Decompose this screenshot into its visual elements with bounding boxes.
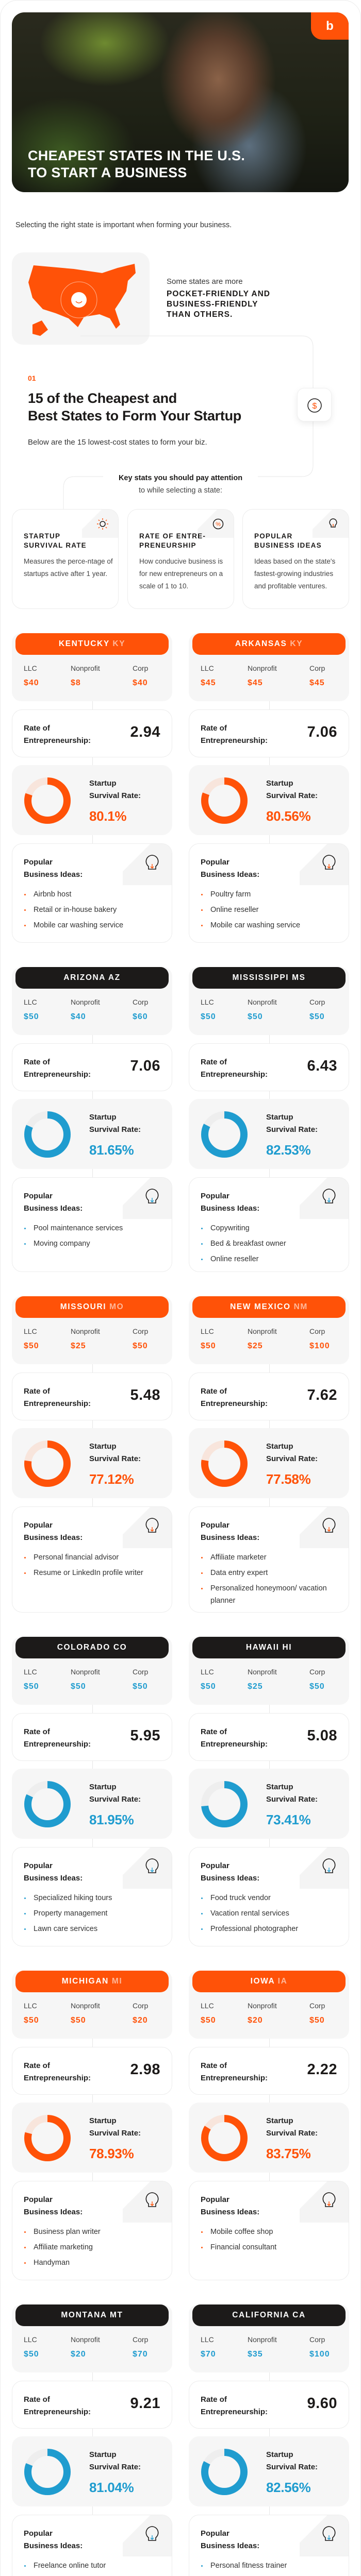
text: Startup [266,1113,293,1122]
text: $50 [24,1682,39,1691]
text: Popular [24,2529,53,2538]
text: Entrepreneurship: [201,736,268,745]
text: Corp [309,2335,325,2344]
text: Nonprofit [71,1327,100,1335]
text: Freelance online tutor [34,2562,106,2570]
text: $70 [133,2350,148,2359]
text: $40 [133,679,148,687]
text: $50 [201,1012,216,1021]
state: Missouri [12,1296,172,1613]
text: Specialized hiking tours [34,1894,112,1902]
text: $40 [71,1012,86,1021]
text: Entrepreneurship: [201,1070,268,1079]
text: Rate of [201,724,227,733]
text: Corp [309,2002,325,2010]
text: Popular [24,1192,53,1200]
text: Survival Rate: [266,791,318,800]
text: 5.08 [307,1727,337,1744]
text: 81.04% [89,2480,134,2495]
key card: entrepreneurship: How conducive business is for new entrepreneurs on a scale of 1 to 10. [139,557,223,590]
key card: ideas: POPULAR [254,532,292,540]
text: $50 [71,1682,86,1691]
section heading: Best States to Form Your Startup [28,408,241,423]
text: 82.53% [266,1142,310,1158]
text: LLC [24,998,37,1006]
text: Popular [201,1521,229,1530]
text: Rate of [24,1058,50,1066]
text: Entrepreneurship: [201,1740,268,1749]
state: California [189,2304,349,2576]
key card: entrepreneurship [127,509,234,609]
text: Online reseller [210,1255,259,1263]
state: Arizona [12,967,172,1272]
text: ARKANSAS KY [235,639,303,648]
text: $20 [71,2350,86,2359]
map callout text [167,277,270,319]
text: LLC [201,998,214,1006]
state: Montana [12,2304,172,2576]
icon: dollar: $ [313,402,317,411]
map callout text: Some states are more [167,277,243,286]
text: Rate of [201,1727,227,1736]
text: Popular [24,1521,53,1530]
text: Mobile car washing service [34,921,123,929]
text: $70 [201,2350,216,2359]
text: $25 [248,1342,263,1350]
text: Startup [89,779,117,788]
text: Business Ideas: [201,1533,259,1542]
state: Hawaii [189,1637,349,1946]
text: LLC [24,1668,37,1676]
text: Entrepreneurship: [24,2074,91,2082]
key card: entrepreneurship: RATE OF ENTRE- [139,532,206,540]
text: Corp [309,664,325,672]
text: COLORADO CO [57,1643,127,1652]
text: Moving company [34,1240,90,1248]
key card: survival: STARTUP [24,532,60,540]
text: Business Ideas: [24,870,83,879]
text: LLC [201,1668,214,1676]
text: $45 [309,679,325,687]
text: $35 [248,2350,263,2359]
text: Nonprofit [248,1327,277,1335]
key stats intro: Key stats you should pay attention [119,474,242,482]
text: Startup [266,2116,293,2125]
text: 9.21 [130,2395,160,2412]
text: NEW MEXICO NM [230,1302,308,1311]
text: Corp [309,1327,325,1335]
icon: dollar [297,388,332,421]
text: LLC [24,2335,37,2344]
text: MISSISSIPPI MS [232,973,306,982]
key card: entrepreneurship: PRENEURSHIP [139,541,196,549]
text: $50 [24,1342,39,1350]
text: $45 [201,679,216,687]
text: 81.65% [89,1142,134,1158]
text: $60 [133,1012,148,1021]
text: 78.93% [89,2146,134,2161]
text: Copywriting [210,1224,250,1232]
text: Vacation rental services [210,1909,289,1918]
section heading [28,374,241,447]
map callout text: BUSINESS-FRIENDLY [167,300,258,309]
text: Popular [201,2195,229,2204]
text: Rate of [201,1387,227,1396]
text: Personalized honeymoon/ vacation planner [210,1584,327,1605]
state: Colorado [12,1637,172,1946]
text: Retail or in-house bakery [34,906,117,914]
text: LLC [201,664,214,672]
text: Business Ideas: [24,1533,83,1542]
text: Nonprofit [71,2002,100,2010]
text: Corp [309,998,325,1006]
text: Entrepreneurship: [201,2074,268,2082]
text: Property management [34,1909,107,1918]
text: 73.41% [266,1812,310,1827]
text: Popular [24,858,53,867]
key card: entrepreneurship: % [216,521,221,528]
text: 80.1% [89,808,126,824]
text: Professional photographer [210,1925,298,1933]
text: Bed & breakfast owner [210,1240,286,1248]
text: Survival Rate: [89,1795,141,1804]
text: Mobile coffee shop [210,2228,273,2236]
text: $50 [71,2016,86,2025]
text: Corp [133,2335,148,2344]
text: $50 [309,2016,325,2025]
text: Entrepreneurship: [24,1740,91,1749]
hero title: TO START A BUSINESS [28,165,187,180]
text: LLC [24,2002,37,2010]
text: Nonprofit [248,2002,277,2010]
text: Business Ideas: [201,2208,259,2216]
text: Poultry farm [210,890,251,899]
text: Affiliate marketing [34,2243,93,2251]
text: $20 [248,2016,263,2025]
text: Business Ideas: [24,1204,83,1213]
text: Startup [266,779,293,788]
text: LLC [24,664,37,672]
section heading: 01 [28,374,36,382]
text: Nonprofit [248,1668,277,1676]
text: $20 [133,2016,148,2025]
text: LLC [201,2002,214,2010]
text: Rate of [201,2061,227,2070]
text: Business Ideas: [24,1874,83,1883]
brand badge: b [326,19,334,33]
text: Nonprofit [71,998,100,1006]
text: Popular [201,1192,229,1200]
text: 77.58% [266,1471,310,1487]
key card: ideas [242,509,349,609]
text: Rate of [24,2061,50,2070]
text: Handyman [34,2259,70,2267]
map callout text: POCKET-FRIENDLY AND [167,290,270,298]
text: MONTANA MT [61,2311,123,2319]
key card: survival: Measures the perce-ntage of startups active after 1 year. [24,557,113,578]
text: Survival Rate: [266,1125,318,1134]
text: Popular [201,1861,229,1870]
text: $50 [133,1682,148,1691]
text: Nonprofit [248,664,277,672]
text: Popular [201,2529,229,2538]
text: Survival Rate: [266,1795,318,1804]
text: IOWA IA [251,1977,287,1986]
text: Nonprofit [71,1668,100,1676]
text: Rate of [201,2395,227,2404]
text: Entrepreneurship: [201,1399,268,1408]
text: Nonprofit [71,2335,100,2344]
text: 7.06 [130,1058,160,1074]
text: Business Ideas: [201,870,259,879]
text: Startup [89,1783,117,1791]
text: LLC [201,1327,214,1335]
state: Mississippi [189,967,349,1272]
text: $50 [248,1012,263,1021]
text: Business Ideas: [201,1204,259,1213]
state: Kentucky [12,633,172,943]
section heading: Below are the 15 lowest-cost states to form your biz. [28,438,207,447]
text: 9.60 [307,2395,337,2412]
text: Survival Rate: [89,1125,141,1134]
state: New Mexico [189,1296,349,1613]
text: $50 [24,2016,39,2025]
text: Popular [24,2195,53,2204]
text: Nonprofit [71,664,100,672]
text: $50 [24,2350,39,2359]
text: Survival Rate: [89,791,141,800]
text: Corp [133,1327,148,1335]
text: Entrepreneurship: [24,2408,91,2416]
text: 7.06 [307,724,337,740]
text: Startup [266,2450,293,2459]
text: Airbnb host [34,890,71,899]
hero image [12,12,349,192]
text: $50 [309,1682,325,1691]
text: LLC [24,1327,37,1335]
text: 5.48 [130,1387,160,1403]
text: Personal fitness trainer [210,2562,287,2570]
text: Business Ideas: [201,2541,259,2550]
text: Entrepreneurship: [24,1070,91,1079]
text: CALIFORNIA CA [232,2311,306,2319]
text: Rate of [24,2395,50,2404]
text: Financial consultant [210,2243,276,2251]
text: MICHIGAN MI [62,1977,122,1986]
text: 2.94 [130,724,160,740]
text: Rate of [24,1727,50,1736]
text: Nonprofit [248,998,277,1006]
text: Data entry expert [210,1569,268,1577]
state: Michigan [12,1971,172,2280]
text: Entrepreneurship: [24,736,91,745]
key stats intro [119,474,242,495]
text: Business Ideas: [24,2208,83,2216]
text: LLC [201,2335,214,2344]
text: 82.56% [266,2480,310,2495]
text: 2.98 [130,2061,160,2078]
key stats intro: to while selecting a state: [139,486,222,495]
text: 80.56% [266,808,310,824]
text: $25 [71,1342,86,1350]
text: $45 [248,679,263,687]
text: Nonprofit [248,2335,277,2344]
text: Mobile car washing service [210,921,300,929]
intro text: Selecting the right state is important when forming your business. [15,221,232,229]
brand badge [311,12,349,40]
text: Startup [266,1442,293,1451]
text: KENTUCKY KY [59,639,125,648]
section heading: 15 of the Cheapest and [28,391,177,406]
text: $100 [309,1342,330,1350]
text: 2.22 [307,2061,337,2078]
text: Rate of [24,1387,50,1396]
key card: survival: SURVIVAL RATE [24,541,87,549]
map card [12,252,150,345]
text: Lawn care services [34,1925,97,1933]
text: 6.43 [307,1058,337,1074]
text: Startup [89,2450,117,2459]
text: Affiliate marketer [210,1553,267,1562]
text: Popular [201,858,229,867]
text: $40 [24,679,39,687]
text: 81.95% [89,1812,134,1827]
text: Survival Rate: [89,2129,141,2138]
text: $50 [24,1012,39,1021]
text: $25 [248,1682,263,1691]
text: $8 [71,679,81,687]
text: Entrepreneurship: [201,2408,268,2416]
text: Business Ideas: [201,1874,259,1883]
text: Survival Rate: [89,2463,141,2471]
hero title [28,148,245,180]
text: Survival Rate: [266,1454,318,1463]
text: 7.62 [307,1387,337,1403]
text: Startup [266,1783,293,1791]
text: Corp [133,998,148,1006]
connector outline [63,336,314,509]
text: Survival Rate: [266,2129,318,2138]
text: MISSOURI MO [60,1302,124,1311]
hero title: CHEAPEST STATES IN THE U.S. [28,148,245,163]
text: Business plan writer [34,2228,101,2236]
map callout text: THAN OTHERS. [167,310,233,319]
text: Corp [309,1668,325,1676]
text: Resume or LinkedIn profile writer [34,1569,143,1577]
text: $100 [309,2350,330,2359]
text: $50 [201,2016,216,2025]
text: 77.12% [89,1471,134,1487]
text: 5.95 [130,1727,160,1744]
text: Survival Rate: [266,2463,318,2471]
text: Startup [89,2116,117,2125]
text: ARIZONA AZ [63,973,121,982]
text: Business Ideas: [24,2541,83,2550]
key card: survival [12,509,119,609]
text: Corp [133,664,148,672]
text: Online reseller [210,906,259,914]
text: $50 [201,1342,216,1350]
text: Startup [89,1113,117,1122]
text: Startup [89,1442,117,1451]
text: Popular [24,1861,53,1870]
state: Arkansas [189,633,349,943]
text: Rate of [201,1058,227,1066]
text: $50 [201,1682,216,1691]
text: Pool maintenance services [34,1224,123,1232]
text: $50 [309,1012,325,1021]
text: Corp [133,1668,148,1676]
text: Survival Rate: [89,1454,141,1463]
text: Personal financial advisor [34,1553,119,1562]
key card: ideas: BUSINESS IDEAS [254,541,322,549]
text: HAWAII HI [246,1643,292,1652]
text: $50 [133,1342,148,1350]
text: 83.75% [266,2146,310,2161]
text: Corp [133,2002,148,2010]
text: Food truck vendor [210,1894,271,1902]
state: Iowa [189,1971,349,2280]
text: Entrepreneurship: [24,1399,91,1408]
key card: ideas: Ideas based on the state's fastest-growing industries and profitable ventures. [254,557,335,590]
text: Rate of [24,724,50,733]
